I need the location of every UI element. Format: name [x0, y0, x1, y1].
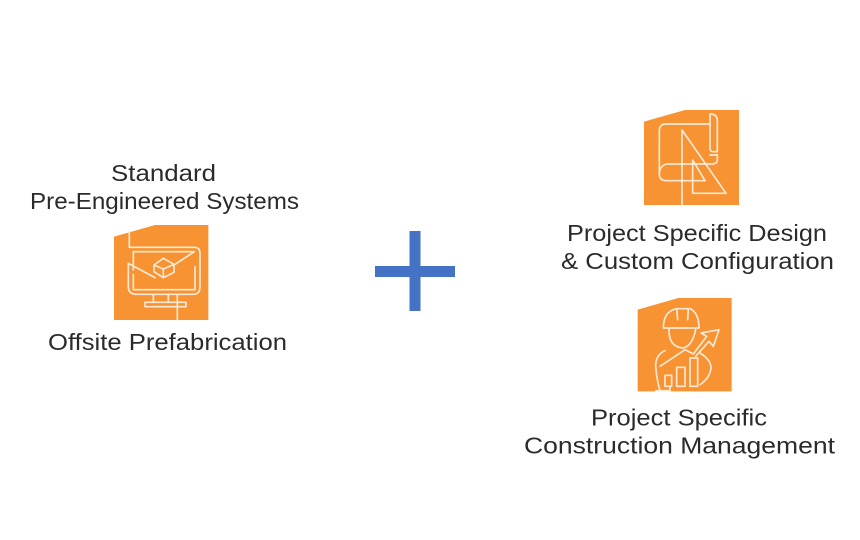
label: project specific design [561, 220, 834, 274]
label: project specific design: Project Specific Design [567, 220, 827, 246]
heading: standard pre-engineered systems [30, 160, 299, 214]
label: project specific construction management [524, 404, 836, 458]
label: project specific construction management: Construction Management [524, 432, 836, 458]
icon: blueprint and set square [644, 110, 739, 205]
icon: plus sign [375, 231, 455, 311]
icon: monitor with cube [114, 225, 208, 320]
label: project specific construction management: Project Specific [591, 404, 767, 430]
icon: worker with hard hat and growth chart [638, 298, 732, 391]
label: offsite prefabrication: Offsite Prefabrication [48, 329, 287, 355]
label: project specific design: & Custom Configuration [561, 248, 834, 274]
heading: standard pre-engineered systems: Standard [111, 160, 216, 186]
heading: standard pre-engineered systems: Pre-Engineered Systems [30, 188, 299, 214]
